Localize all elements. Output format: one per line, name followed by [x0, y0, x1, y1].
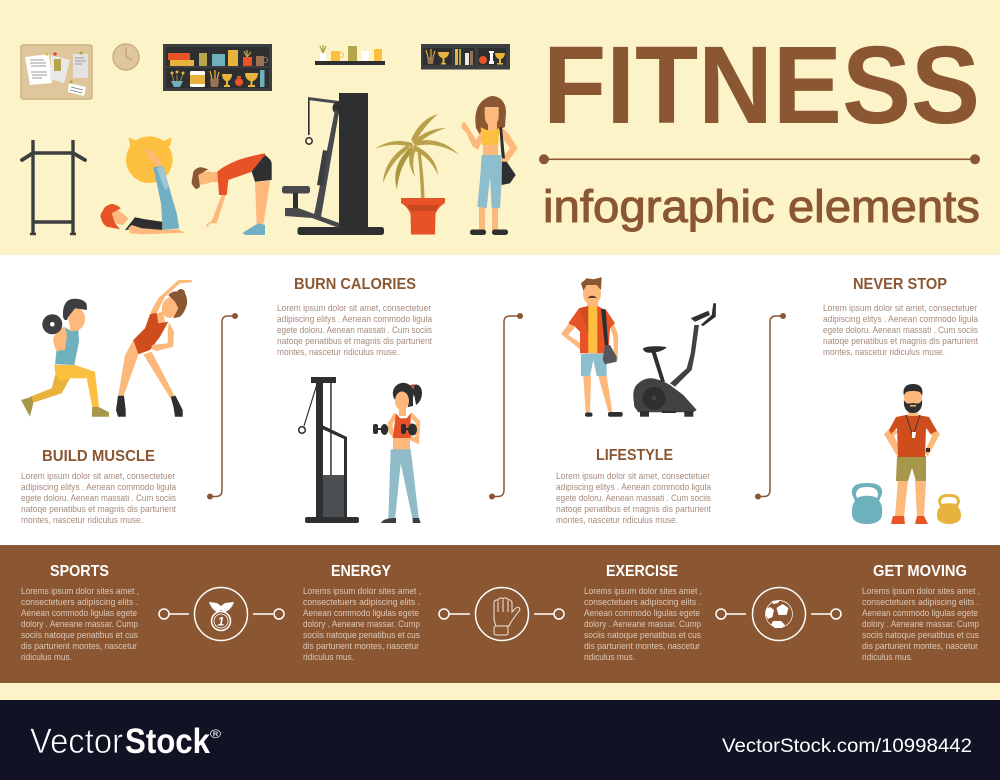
- text block: Aenean commodo ligulas egete: [584, 608, 700, 618]
- icon: right wall shelf: [421, 44, 510, 70]
- text block: sociis natoque penatibus et cus: [303, 630, 420, 640]
- heading: ENERGY: [331, 563, 391, 580]
- text block: egete doloru. Aenean massati . Cum sociis: [823, 325, 978, 335]
- icon: medal: [159, 588, 284, 640]
- text block: Lorem ipsum dolor sit amet, consectetuer: [556, 471, 710, 481]
- text block: natoqe penatibus et magnis dis parturient: [823, 336, 978, 346]
- text block: adipiscing elitys . Aenean commodo ligula: [277, 314, 433, 324]
- text block: sociis natoque penatibus et cus: [21, 630, 138, 640]
- title: FITNESS: [543, 24, 980, 147]
- title divider: [539, 154, 980, 164]
- text block: ridiculus mus.: [303, 652, 354, 662]
- text block: ridiculus mus.: [21, 652, 72, 662]
- panel: top cream banner: [0, 0, 1000, 255]
- illustration: weight machine: [299, 377, 359, 523]
- panel: burn calories: [277, 276, 433, 523]
- text block: consectetuers adipiscing elits .: [584, 597, 701, 607]
- heading: LIFESTYLE: [596, 447, 673, 464]
- text block: dolory . Aeneane massar. Cump: [21, 619, 138, 629]
- connector bracket 3: [755, 313, 786, 500]
- text block: [21, 471, 177, 525]
- text block: Lorems ipsum dolor sites amet ,: [21, 586, 139, 596]
- heading: NEVER STOP: [853, 276, 947, 293]
- text block: dolory . Aeneane massar. Cump: [862, 619, 979, 629]
- text block: Lorem ipsum dolor sit amet, consectetuer: [823, 303, 977, 313]
- text block: dis parturient montes, nascetur: [21, 641, 137, 651]
- heading: BUILD MUSCLE: [42, 448, 155, 465]
- text block: Lorems ipsum dolor sites amet ,: [584, 586, 702, 596]
- panel: never stop: [823, 276, 979, 524]
- text block: dolory . Aeneane massar. Cump: [303, 619, 420, 629]
- text block: montes, nascetur ridiculus muse.: [823, 347, 945, 357]
- text block: Lorem ipsum dolor sit amet, consectetuer: [21, 471, 175, 481]
- icon: yellow kettlebell: [937, 494, 961, 524]
- connector bracket 1: [207, 313, 238, 500]
- icon: small shelf with cups: [315, 45, 385, 65]
- text block: Aenean commodo ligulas egete: [21, 608, 137, 618]
- illustration: lunging figure with weight plate: [21, 299, 109, 417]
- text block: dis parturient montes, nascetur: [303, 641, 419, 651]
- illustration: exercise bike: [633, 303, 716, 417]
- text block: natoqe penatibus et magnis dis parturient: [556, 504, 711, 514]
- icon: goalkeeper glove: [439, 588, 564, 640]
- text block: Aenean commodo ligulas egete: [303, 608, 419, 618]
- text block: dolory . Aeneane massar. Cump: [584, 619, 701, 629]
- text block: egete doloru. Aenean massati . Cum sociis: [556, 493, 711, 503]
- panel: brown band: [0, 545, 1000, 683]
- icon: blue kettlebell: [852, 483, 882, 524]
- watermark logo: ®: [210, 727, 221, 741]
- illustration: woman waving with bag: [462, 96, 518, 235]
- text block: [584, 586, 702, 662]
- text block: [21, 586, 139, 662]
- text block: Lorems ipsum dolor sites amet ,: [303, 586, 421, 596]
- text block: [277, 303, 433, 357]
- heading: SPORTS: [50, 563, 109, 580]
- connector bracket 2: [489, 313, 523, 500]
- watermark logo: [30, 722, 221, 761]
- icon: pull-up bar: [22, 140, 85, 235]
- icon: wall clock: [113, 44, 139, 70]
- text block: montes, nascetur ridiculus muse.: [556, 515, 678, 525]
- heading: BURN CALORIES: [294, 276, 416, 293]
- icon: soccer ball: [716, 588, 841, 640]
- panel: watermark footer: [0, 700, 1000, 780]
- panel: lifestyle: [556, 277, 716, 525]
- text block: adipiscing elitys . Aenean commodo ligula: [556, 482, 712, 492]
- text block: ridiculus mus.: [584, 652, 635, 662]
- text block: Lorems ipsum dolor sites amet ,: [862, 586, 980, 596]
- text block: [862, 586, 980, 662]
- text block: consectetuers adipiscing elits .: [303, 597, 420, 607]
- illustration: woman with exercise ball: [101, 136, 185, 234]
- text block: adipiscing elitys . Aenean commodo ligula: [21, 482, 177, 492]
- watermark image id: VectorStock.com/10998442: [722, 736, 972, 757]
- text block: adipiscing elitys . Aenean commodo ligula: [823, 314, 979, 324]
- illustration: potted palm: [375, 114, 459, 234]
- text block: consectetuers adipiscing elits .: [21, 597, 138, 607]
- text block: [556, 471, 712, 525]
- text block: sociis natoque penatibus et cus: [862, 630, 979, 640]
- panel: exercise: [584, 563, 702, 662]
- text block: [823, 303, 979, 357]
- heading: EXERCISE: [606, 563, 678, 580]
- panel: get moving: [862, 563, 980, 662]
- text block: Aenean commodo ligulas egete: [862, 608, 978, 618]
- text block: montes, nascetur ridiculus muse.: [21, 515, 143, 525]
- text block: Lorem ipsum dolor sit amet, consectetuer: [277, 303, 431, 313]
- icon: medal: 1: [218, 614, 225, 628]
- panel: cream strip: [0, 683, 1000, 700]
- text block: montes, nascetur ridiculus muse.: [277, 347, 399, 357]
- panel: energy: [303, 563, 421, 662]
- text block: [303, 586, 421, 662]
- illustration: bending man: [192, 153, 272, 235]
- panel: build muscle: [21, 280, 192, 525]
- heading: GET MOVING: [873, 563, 967, 580]
- text block: egete doloru. Aenean massati . Cum sociis: [277, 325, 432, 335]
- illustration: man with mustache and bag: [561, 277, 623, 417]
- text block: sociis natoque penatibus et cus: [584, 630, 701, 640]
- illustration: coach with whistle: [884, 384, 940, 524]
- panel: sports: [21, 563, 139, 662]
- icon: large wall shelf: [163, 44, 272, 91]
- watermark logo: Stock: [125, 722, 210, 761]
- illustration: woman with dumbbells: [373, 383, 422, 523]
- text block: dis parturient montes, nascetur: [862, 641, 978, 651]
- text block: ridiculus mus.: [862, 652, 913, 662]
- icon: cork board: [21, 45, 92, 99]
- text block: egete doloru. Aenean massati . Cum sociis: [21, 493, 176, 503]
- watermark logo: Vector: [30, 722, 123, 761]
- illustration: side-stretching woman: [116, 280, 192, 417]
- text block: consectetuers adipiscing elits .: [862, 597, 979, 607]
- subtitle: infographic elements: [543, 181, 980, 232]
- illustration: cable machine: [282, 93, 384, 235]
- text block: dis parturient montes, nascetur: [584, 641, 700, 651]
- text block: natoqe penatibus et magnis dis parturient: [21, 504, 176, 514]
- text block: natoqe penatibus et magnis dis parturient: [277, 336, 432, 346]
